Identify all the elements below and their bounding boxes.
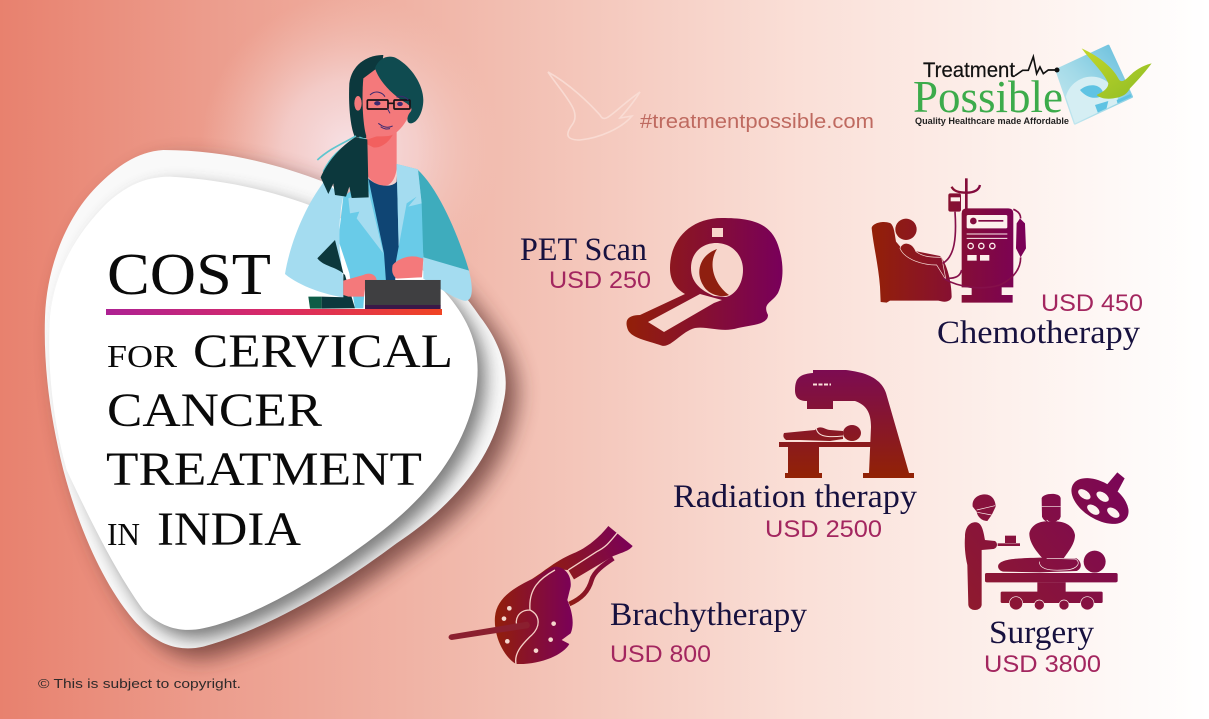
icon: brachytherapy applicator [449,526,633,664]
stethoscope strands [317,136,367,172]
lamp lights [1076,487,1121,520]
title text [106,241,453,556]
organ dots [502,606,556,653]
glasses and face details [367,100,410,109]
machine divider lines [967,234,1007,238]
gantry [795,370,914,478]
left sleeve [285,182,343,297]
tube divider [568,532,618,570]
treatment table top [779,442,871,447]
PET Scan price: USD 250 [549,267,651,294]
fringe hair [375,57,423,123]
ponytail [321,137,369,198]
assistant mask line [977,506,995,515]
organ silhouette [495,567,573,664]
neck shadow [366,130,395,147]
logo word Treatment: Treatment [923,59,1015,82]
patient head [843,425,861,441]
upper tube [530,526,633,580]
surgeon body [1029,521,1075,560]
blob back layer [45,150,506,648]
item: Radiation therapy [673,370,918,543]
scanner bore core [699,249,729,296]
logo pulse line [1015,57,1059,76]
screen bar [978,220,1003,222]
title word INDIA: INDIA [157,503,301,556]
back hair [349,55,383,138]
patient head [895,219,917,240]
assistant body [965,522,997,610]
title word COST: COST [107,241,271,307]
surgeon mask line [1042,507,1061,522]
scanner indicator [712,228,723,237]
panel: title blob [45,150,518,658]
title word IN: IN [107,516,140,552]
ear [354,96,362,111]
patient body [783,427,843,441]
table column [1037,582,1066,592]
PET Scan label: PET Scan [520,232,647,268]
dark coat lining [317,240,355,309]
IV bag label [951,197,960,201]
surgical lamp stem [1107,472,1125,493]
illustration: doctor [285,55,472,310]
Surgery price: USD 3800 [984,651,1101,678]
side pump [1016,218,1026,257]
Brachytherapy label: Brachytherapy [610,597,808,633]
machine buttons [967,255,989,261]
IV bag [948,193,961,212]
IV pole [965,178,968,209]
scanner body [626,218,782,346]
logo tagline: Quality Healthcare made Affordable [915,116,1069,127]
lower tube [569,558,613,604]
left lapel highlight [348,190,383,253]
scanner bed highlight [648,294,722,332]
Radiation therapy label: Radiation therapy [673,479,918,515]
chair back [308,297,322,309]
title rule [106,309,442,315]
right lapel highlight [397,164,422,247]
logo bird [1082,48,1152,99]
neck and chest [366,127,397,186]
left hand [343,274,377,297]
gantry indicator [813,384,831,386]
table wheels [1009,597,1094,610]
icon: surgery team [965,469,1137,610]
blouse [368,164,399,282]
operating table top [985,573,1118,582]
Chemotherapy price: USD 450 [1041,290,1143,317]
blob outer shadow [57,160,518,658]
title word CERVICAL: CERVICAL [193,325,453,378]
watermark bird [548,72,640,140]
patient arm outline [1039,558,1078,570]
teal coat back [417,169,469,271]
icon: scanner [626,218,782,346]
icon: radiation machine [779,370,914,478]
left coat front [338,178,386,308]
tray [998,543,1020,546]
right sleeve [423,257,472,301]
patient body [900,243,946,280]
surgical lamp [1063,469,1137,533]
copyright note: © This is subject to copyright. [38,676,241,691]
logo word Possible: Possible [913,71,1063,122]
tubes [943,209,1021,288]
face [363,68,412,136]
laptop [365,280,441,305]
item: Chemotherapy [872,178,1143,351]
website hashtag: #treatmentpossible.com [640,111,874,133]
Surgery label: Surgery [989,615,1094,651]
machine body [962,208,1013,303]
machine dials [968,243,995,249]
title word TREATMENT: TREATMENT [106,443,422,496]
scanner bore [691,243,743,297]
item: Surgery [965,469,1137,678]
surgeon head [1042,494,1061,523]
screen dot [970,218,977,224]
applicator rod [449,622,530,640]
patient [998,558,1081,572]
icon: chemotherapy chair and machine [872,178,1026,303]
patient head [1084,551,1106,573]
eyes and mouth [370,92,408,129]
Radiation therapy price: USD 2500 [765,516,882,543]
machine screen [967,215,1007,228]
logo globe card [1057,46,1133,130]
Brachytherapy price: USD 800 [610,641,711,668]
title word CANCER: CANCER [107,384,322,437]
table base [1001,592,1103,603]
item: PET Scan [520,218,782,346]
laptop base [365,305,441,310]
right lapel and coat front [395,164,423,277]
right hand [392,256,423,279]
blob front layer [49,177,478,630]
organ divider lines [516,570,555,664]
glow behind doctor [200,0,500,305]
IV hooks [952,185,980,193]
tray box [1005,536,1016,543]
Chemotherapy label: Chemotherapy [937,315,1141,351]
patient arm outline [816,426,843,437]
item: Brachytherapy [449,526,808,668]
logo: Treatment Possible [913,46,1152,130]
treatment table base [785,473,822,478]
treatment table column [788,447,819,474]
title word FOR: FOR [107,338,178,374]
armchair [872,222,952,303]
assistant head and mask [973,494,996,521]
